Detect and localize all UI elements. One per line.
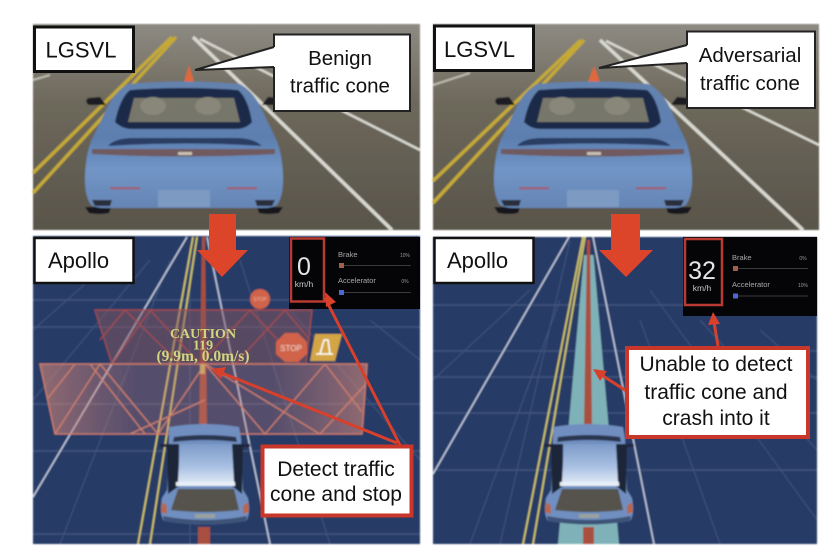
callout: unable to detect traffic cone	[627, 348, 808, 437]
arrow: left LGSVL to Apollo	[197, 214, 248, 277]
icon: adversarial traffic cone	[588, 66, 600, 82]
speed dashboard: 0%	[799, 256, 807, 262]
callout: unable to detect traffic cone: traffic cone and	[644, 381, 788, 404]
callout: benign traffic cone: Benign	[308, 47, 372, 70]
obstacle caution text: (9.9m, 0.0m/s)	[156, 348, 250, 365]
icon: yellow obstacle sign	[310, 334, 342, 361]
arrow: callout to speed	[325, 292, 400, 445]
speed dashboard: 32	[688, 257, 716, 285]
label: Apollo: Apollo	[447, 248, 508, 273]
back stop fence	[95, 310, 312, 364]
panel: LGSVL adversarial scene	[433, 24, 819, 230]
car rear view	[494, 82, 692, 214]
label: LGSVL	[434, 26, 534, 70]
callout: adversarial traffic cone	[599, 31, 815, 108]
label: Apollo	[34, 238, 134, 283]
callout: adversarial traffic cone: traffic cone	[700, 72, 800, 95]
callout: detect traffic cone and stop: cone and stop	[270, 483, 402, 506]
panel: LGSVL benign scene	[33, 24, 420, 230]
car top view	[544, 424, 634, 524]
arrow: callout to lane	[593, 369, 628, 392]
label: Apollo: Apollo	[48, 248, 109, 273]
label: LGSVL	[34, 27, 134, 72]
speed dashboard: 0	[297, 253, 311, 281]
panel: Apollo detection scene	[33, 236, 420, 544]
speed dashboard: Brake	[338, 250, 358, 259]
speed dashboard	[683, 237, 817, 316]
arrow: right LGSVL to Apollo	[599, 214, 653, 277]
red planned path	[583, 240, 594, 544]
callout: detect traffic cone and stop	[262, 446, 412, 516]
callout: benign traffic cone: traffic cone	[290, 74, 390, 98]
label: LGSVL: LGSVL	[444, 37, 515, 62]
speed dashboard: km/h	[295, 279, 313, 289]
speed dashboard: 10%	[400, 253, 411, 259]
car top view	[160, 424, 250, 524]
arrow: callout to cone	[211, 367, 397, 443]
speed dashboard: 0%	[401, 279, 409, 285]
panel: Apollo crash scene	[433, 237, 817, 544]
red planned path	[198, 237, 210, 544]
icon: benign traffic cone	[184, 65, 194, 82]
icon: small stop sign	[250, 289, 270, 309]
icon: small stop sign: STOP	[253, 297, 267, 303]
arrow: callout to speed	[708, 312, 720, 346]
speed dashboard: Brake	[732, 253, 752, 262]
front stop fence	[40, 364, 367, 434]
callout: detect traffic cone and stop: Detect traffic	[277, 458, 395, 481]
speed dashboard: km/h	[693, 283, 711, 293]
obstacle caution text: 119	[193, 338, 213, 354]
teal lane corridor	[558, 255, 619, 544]
callout: unable to detect traffic cone: Unable to detect	[640, 353, 793, 376]
speed dashboard	[289, 237, 420, 309]
obstacle caution text	[156, 327, 250, 365]
label: LGSVL: LGSVL	[46, 38, 116, 62]
callout: unable to detect traffic cone: crash into it	[662, 407, 770, 430]
red detected cone marker	[200, 364, 205, 374]
icon: large stop sign: STOP	[280, 344, 302, 353]
speed dashboard: Accelerator	[338, 276, 376, 285]
car rear view	[85, 82, 283, 214]
speed dashboard: Accelerator	[732, 280, 770, 289]
obstacle caution text: CAUTION	[170, 327, 236, 342]
icon: large stop sign	[276, 333, 307, 362]
callout: adversarial traffic cone: Adversarial	[699, 44, 801, 67]
callout: benign traffic cone	[195, 34, 410, 111]
label: Apollo	[434, 238, 534, 283]
speed dashboard: 10%	[798, 283, 809, 289]
